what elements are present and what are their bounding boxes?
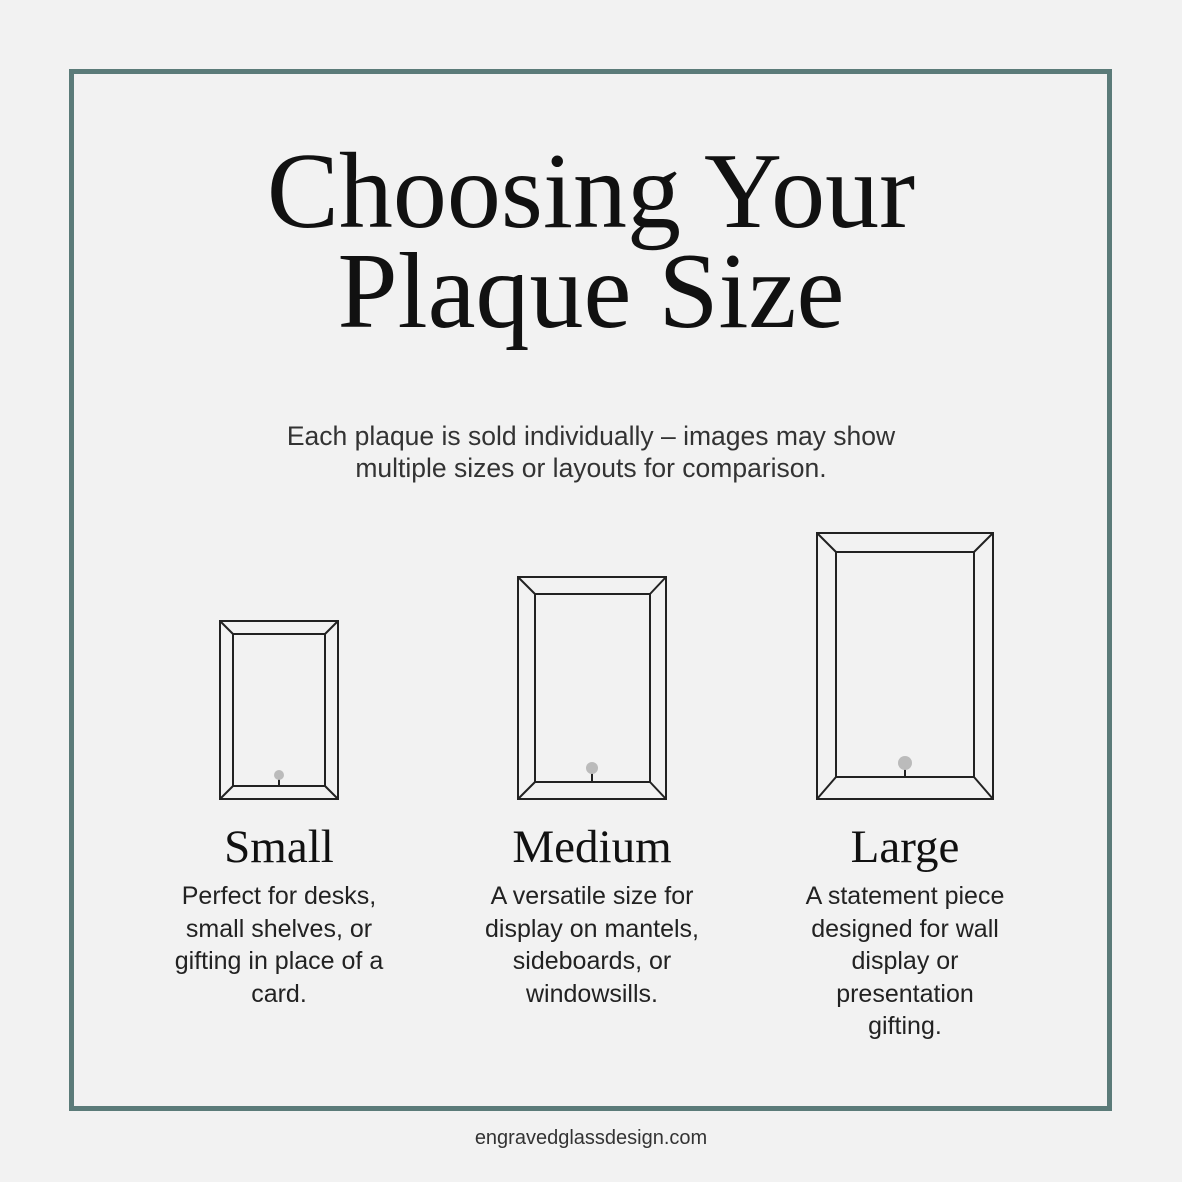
footer url: engravedglassdesign.com [475,1127,707,1149]
heading: medium: Medium [512,821,672,873]
text: large: presentation [836,980,974,1008]
text: large: gifting. [868,1012,942,1040]
text: small: small shelves, or [186,914,372,942]
icon: medium plaque [518,577,666,799]
heading: small: Small [224,821,334,873]
title: Plaque Size [338,232,844,351]
heading: large: Large [851,821,959,873]
text: large: A statement piece [806,882,1004,910]
text: medium: windowsills. [526,980,658,1008]
text: small: Perfect for desks, [182,882,376,910]
title [267,132,915,351]
column: small [175,821,384,1008]
title: Choosing Your [267,132,915,251]
subtitle [287,421,896,483]
column: medium [485,821,699,1008]
subtitle: Each plaque is sold individually – images may show [287,421,895,451]
subtitle: multiple sizes or layouts for comparison. [355,453,827,483]
text: medium: sideboards, or [513,947,671,975]
icon: small plaque [220,621,338,799]
column: large [806,821,1004,1040]
text: large: designed for wall [811,914,999,942]
border frame [69,69,1112,1111]
text: small [175,882,384,1008]
text: medium: A versatile size for [491,882,693,910]
text: small: card. [251,980,307,1008]
text: large: display or [852,947,958,975]
text: large [806,882,1004,1040]
icon: large plaque [817,533,993,799]
text: medium [485,882,699,1008]
text: small: gifting in place of a [175,947,383,975]
text: medium: display on mantels, [485,914,699,942]
